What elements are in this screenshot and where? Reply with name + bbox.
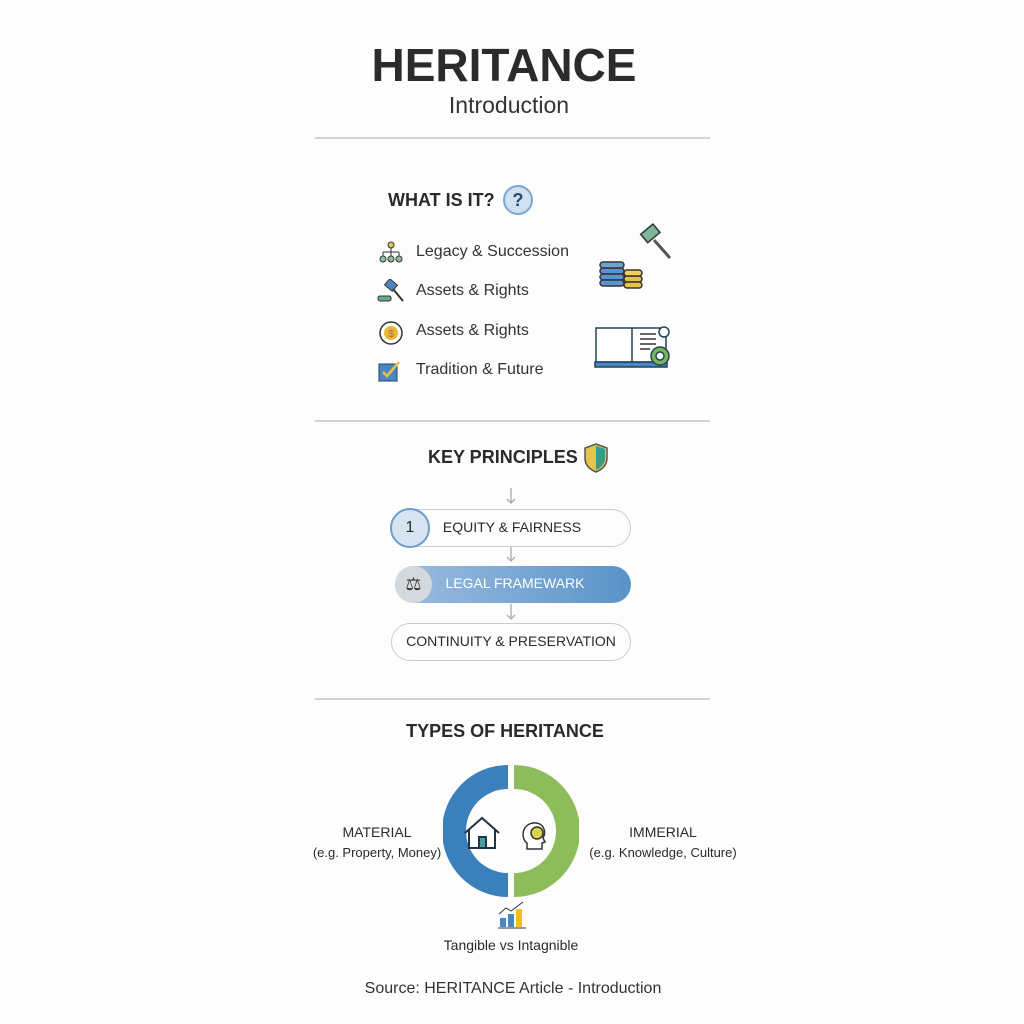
list: what is it items: Legacy & Succession: [416, 243, 569, 260]
icon: gavel: [378, 279, 404, 302]
source: Source: HERITANCE Article - Introduction: [365, 980, 661, 997]
arrows: [506, 488, 516, 620]
label: material: (e.g. Property, Money): [313, 845, 441, 860]
icon: question: [503, 185, 533, 215]
donut chart: [443, 765, 579, 897]
label: immaterial: [589, 824, 737, 860]
heading: types: TYPES OF HERITANCE: [406, 721, 604, 741]
list: what is it items: Tradition & Future: [416, 361, 543, 378]
badge: 1: [390, 508, 430, 548]
icon: coin: [379, 321, 403, 345]
pill: legal framework: LEGAL FRAMEWARK: [446, 575, 584, 591]
icon: scales: [395, 566, 432, 603]
pill: continuity: [391, 623, 631, 661]
icon: scales: ⚖: [405, 574, 422, 594]
icon: bar chart: [498, 902, 526, 928]
label: immaterial: (e.g. Knowledge, Culture): [589, 845, 737, 860]
list: what is it items: Assets & Rights: [416, 282, 529, 299]
label: material: MATERIAL: [342, 824, 411, 840]
pill: equity: EQUITY & FAIRNESS: [443, 519, 581, 535]
label: immaterial: IMMERIAL: [629, 824, 697, 840]
icon: house: [465, 818, 499, 848]
icon: coins and gavel: [599, 223, 671, 289]
pill: legal framework: [395, 566, 631, 603]
icon: head: [523, 823, 545, 849]
heading: what is it: [388, 185, 533, 215]
badge: 1: 1: [406, 519, 414, 536]
list: what is it items: Assets & Rights: [416, 322, 529, 339]
icon: hierarchy: [380, 242, 402, 262]
label: material: [313, 824, 441, 860]
heading: key principles: KEY PRINCIPLES: [428, 447, 578, 467]
icon: shield: [584, 443, 608, 473]
caption: Tangible vs Intagnible: [444, 937, 578, 953]
icon: coin: $: [388, 329, 394, 340]
heading: key principles: [428, 443, 608, 473]
pill: continuity: CONTINUITY & PRESERVATION: [406, 633, 616, 649]
icon: checklist: [378, 361, 400, 382]
subtitle: Introduction: [449, 92, 569, 118]
list: what is it items: [378, 242, 569, 382]
heading: what is it: WHAT IS IT?: [388, 190, 495, 210]
title: HERITANCE: [372, 39, 636, 91]
icon: question: ?: [512, 190, 524, 210]
icon: book and gears: [594, 326, 670, 368]
pill: equity: [391, 509, 631, 547]
